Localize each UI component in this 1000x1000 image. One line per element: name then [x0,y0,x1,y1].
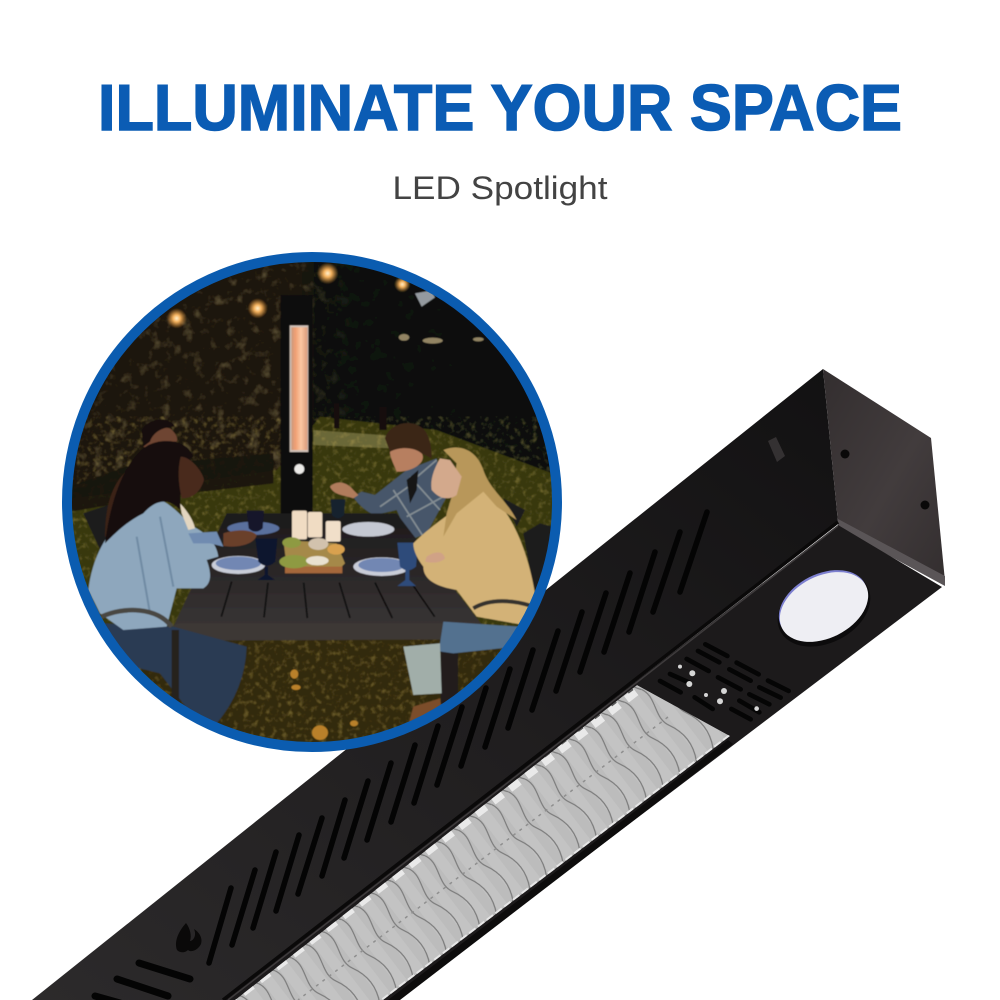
heater end cap [823,369,945,586]
dark lip below reflector [388,740,733,1000]
sky gaps [415,291,435,307]
plates [227,522,279,535]
forest background [312,262,550,472]
photo blue ring [67,257,557,747]
title: ILLUMINATE YOUR SPACE [98,71,902,144]
wine glasses [247,511,264,532]
circular photo: family at outdoor table [60,250,570,750]
vent grille panel [660,644,789,719]
patio heater tower [281,295,313,515]
led spotlight lens [765,556,883,662]
woman in yellow sweater [403,447,535,725]
woman in denim jacket [88,441,257,723]
man in plaid shirt [330,423,447,540]
grass [72,416,552,626]
string lights [167,263,410,328]
icon: flame logo [176,923,202,952]
man in back left [105,419,177,537]
product: heater close-up [32,369,945,1000]
tree trunks [334,403,387,430]
candles [292,511,307,539]
photo scene [60,250,570,750]
charcuterie board [285,565,342,573]
heater underside [223,522,942,1000]
side switch [768,437,785,462]
chairs [83,498,553,597]
table [173,512,482,704]
heater side face with vent slots [32,369,838,1000]
reflector with heating element [228,685,730,1000]
fallen leaves [290,669,358,740]
table setting [212,499,418,586]
front chair leg left [172,630,179,705]
subtitle: LED Spotlight [392,170,608,206]
